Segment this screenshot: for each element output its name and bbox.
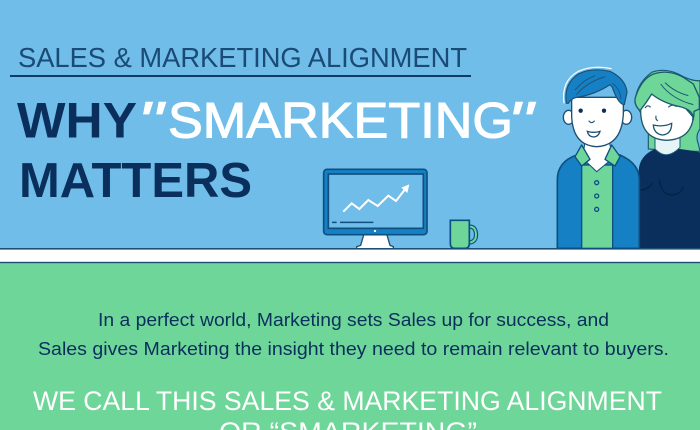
- title line one: WHY: [17, 92, 137, 148]
- illustration: man: [557, 142, 639, 248]
- heading: sales and marketing alignment: SALES & MARKETING ALIGNMENT: [18, 42, 467, 73]
- man head: [563, 67, 632, 147]
- title line one: SMARKETING: [168, 92, 513, 148]
- title line one: ": [507, 90, 536, 152]
- title line one: [17, 90, 536, 152]
- icon: green mug: [450, 220, 476, 248]
- panel: green body background: [0, 263, 700, 430]
- panel: blue header background: [0, 0, 700, 249]
- title line one: ": [137, 90, 166, 152]
- intro text line two: Sales gives Marketing the insight they need to remain relevant to buyers.: [38, 339, 669, 359]
- heading underline: [10, 75, 471, 77]
- title line two: MATTERS: [19, 154, 252, 208]
- illustration: woman: [635, 70, 700, 248]
- intro text line one: In a perfect world, Marketing sets Sales up for success, and: [98, 310, 609, 330]
- icon: computer monitor with rising chart: [324, 169, 427, 249]
- desk shelf: [0, 249, 700, 263]
- callout heading line one: WE CALL THIS SALES & MARKETING ALIGNMENT: [33, 386, 662, 416]
